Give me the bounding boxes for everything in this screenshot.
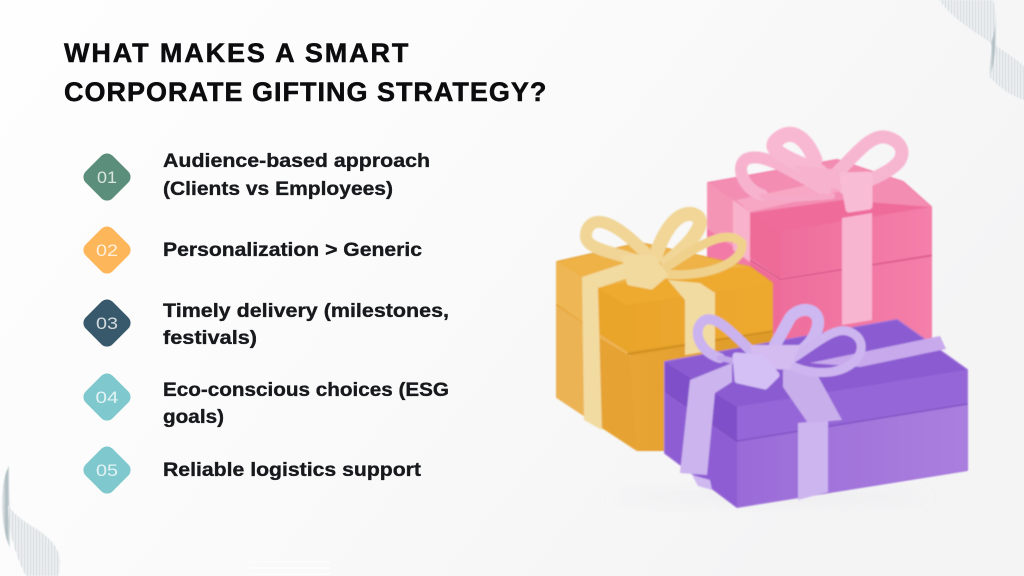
text 02: Personalization > Generic	[163, 239, 422, 261]
silhouette underlay	[708, 160, 931, 345]
silhouette underlay	[557, 243, 772, 450]
list item 02	[80, 223, 422, 277]
badge 02	[80, 223, 134, 277]
text 04: Eco-conscious choices (ESG	[163, 379, 449, 401]
text 04: goals)	[163, 406, 224, 428]
text 03: festivals)	[163, 327, 257, 349]
badge 03: 03	[96, 314, 118, 333]
purple gift box	[665, 310, 967, 507]
badge 05: 05	[96, 461, 118, 480]
orange gift box	[557, 214, 772, 450]
list item 03	[80, 296, 449, 350]
list item 05	[80, 443, 422, 497]
decorative wave: top right	[939, 0, 1024, 100]
badge 05	[80, 443, 134, 497]
badge 03	[80, 296, 134, 350]
text 01: Audience-based approach	[163, 150, 430, 172]
title	[64, 38, 547, 107]
title: CORPORATE GIFTING STRATEGY?	[64, 77, 547, 107]
decorative wave: bottom left	[2, 466, 60, 576]
badge 02: 02	[96, 241, 118, 260]
illustration: gift boxes	[557, 134, 967, 507]
badge 04: 04	[96, 388, 118, 407]
title: WHAT MAKES A SMART	[64, 38, 409, 68]
badge 01: 01	[97, 168, 117, 187]
text 03	[163, 300, 449, 349]
badge 04	[80, 370, 134, 424]
text 01: (Clients vs Employees)	[163, 178, 393, 200]
text 05: Reliable logistics support	[163, 459, 422, 481]
list item 04	[80, 370, 449, 428]
text 03: Timely delivery (milestones,	[163, 300, 449, 322]
text 04	[163, 379, 449, 428]
text 01	[163, 150, 430, 200]
pink gift box	[708, 134, 931, 345]
dotted decoration: bottom	[248, 561, 330, 575]
badge 01	[80, 150, 134, 204]
list item 01	[80, 150, 430, 204]
